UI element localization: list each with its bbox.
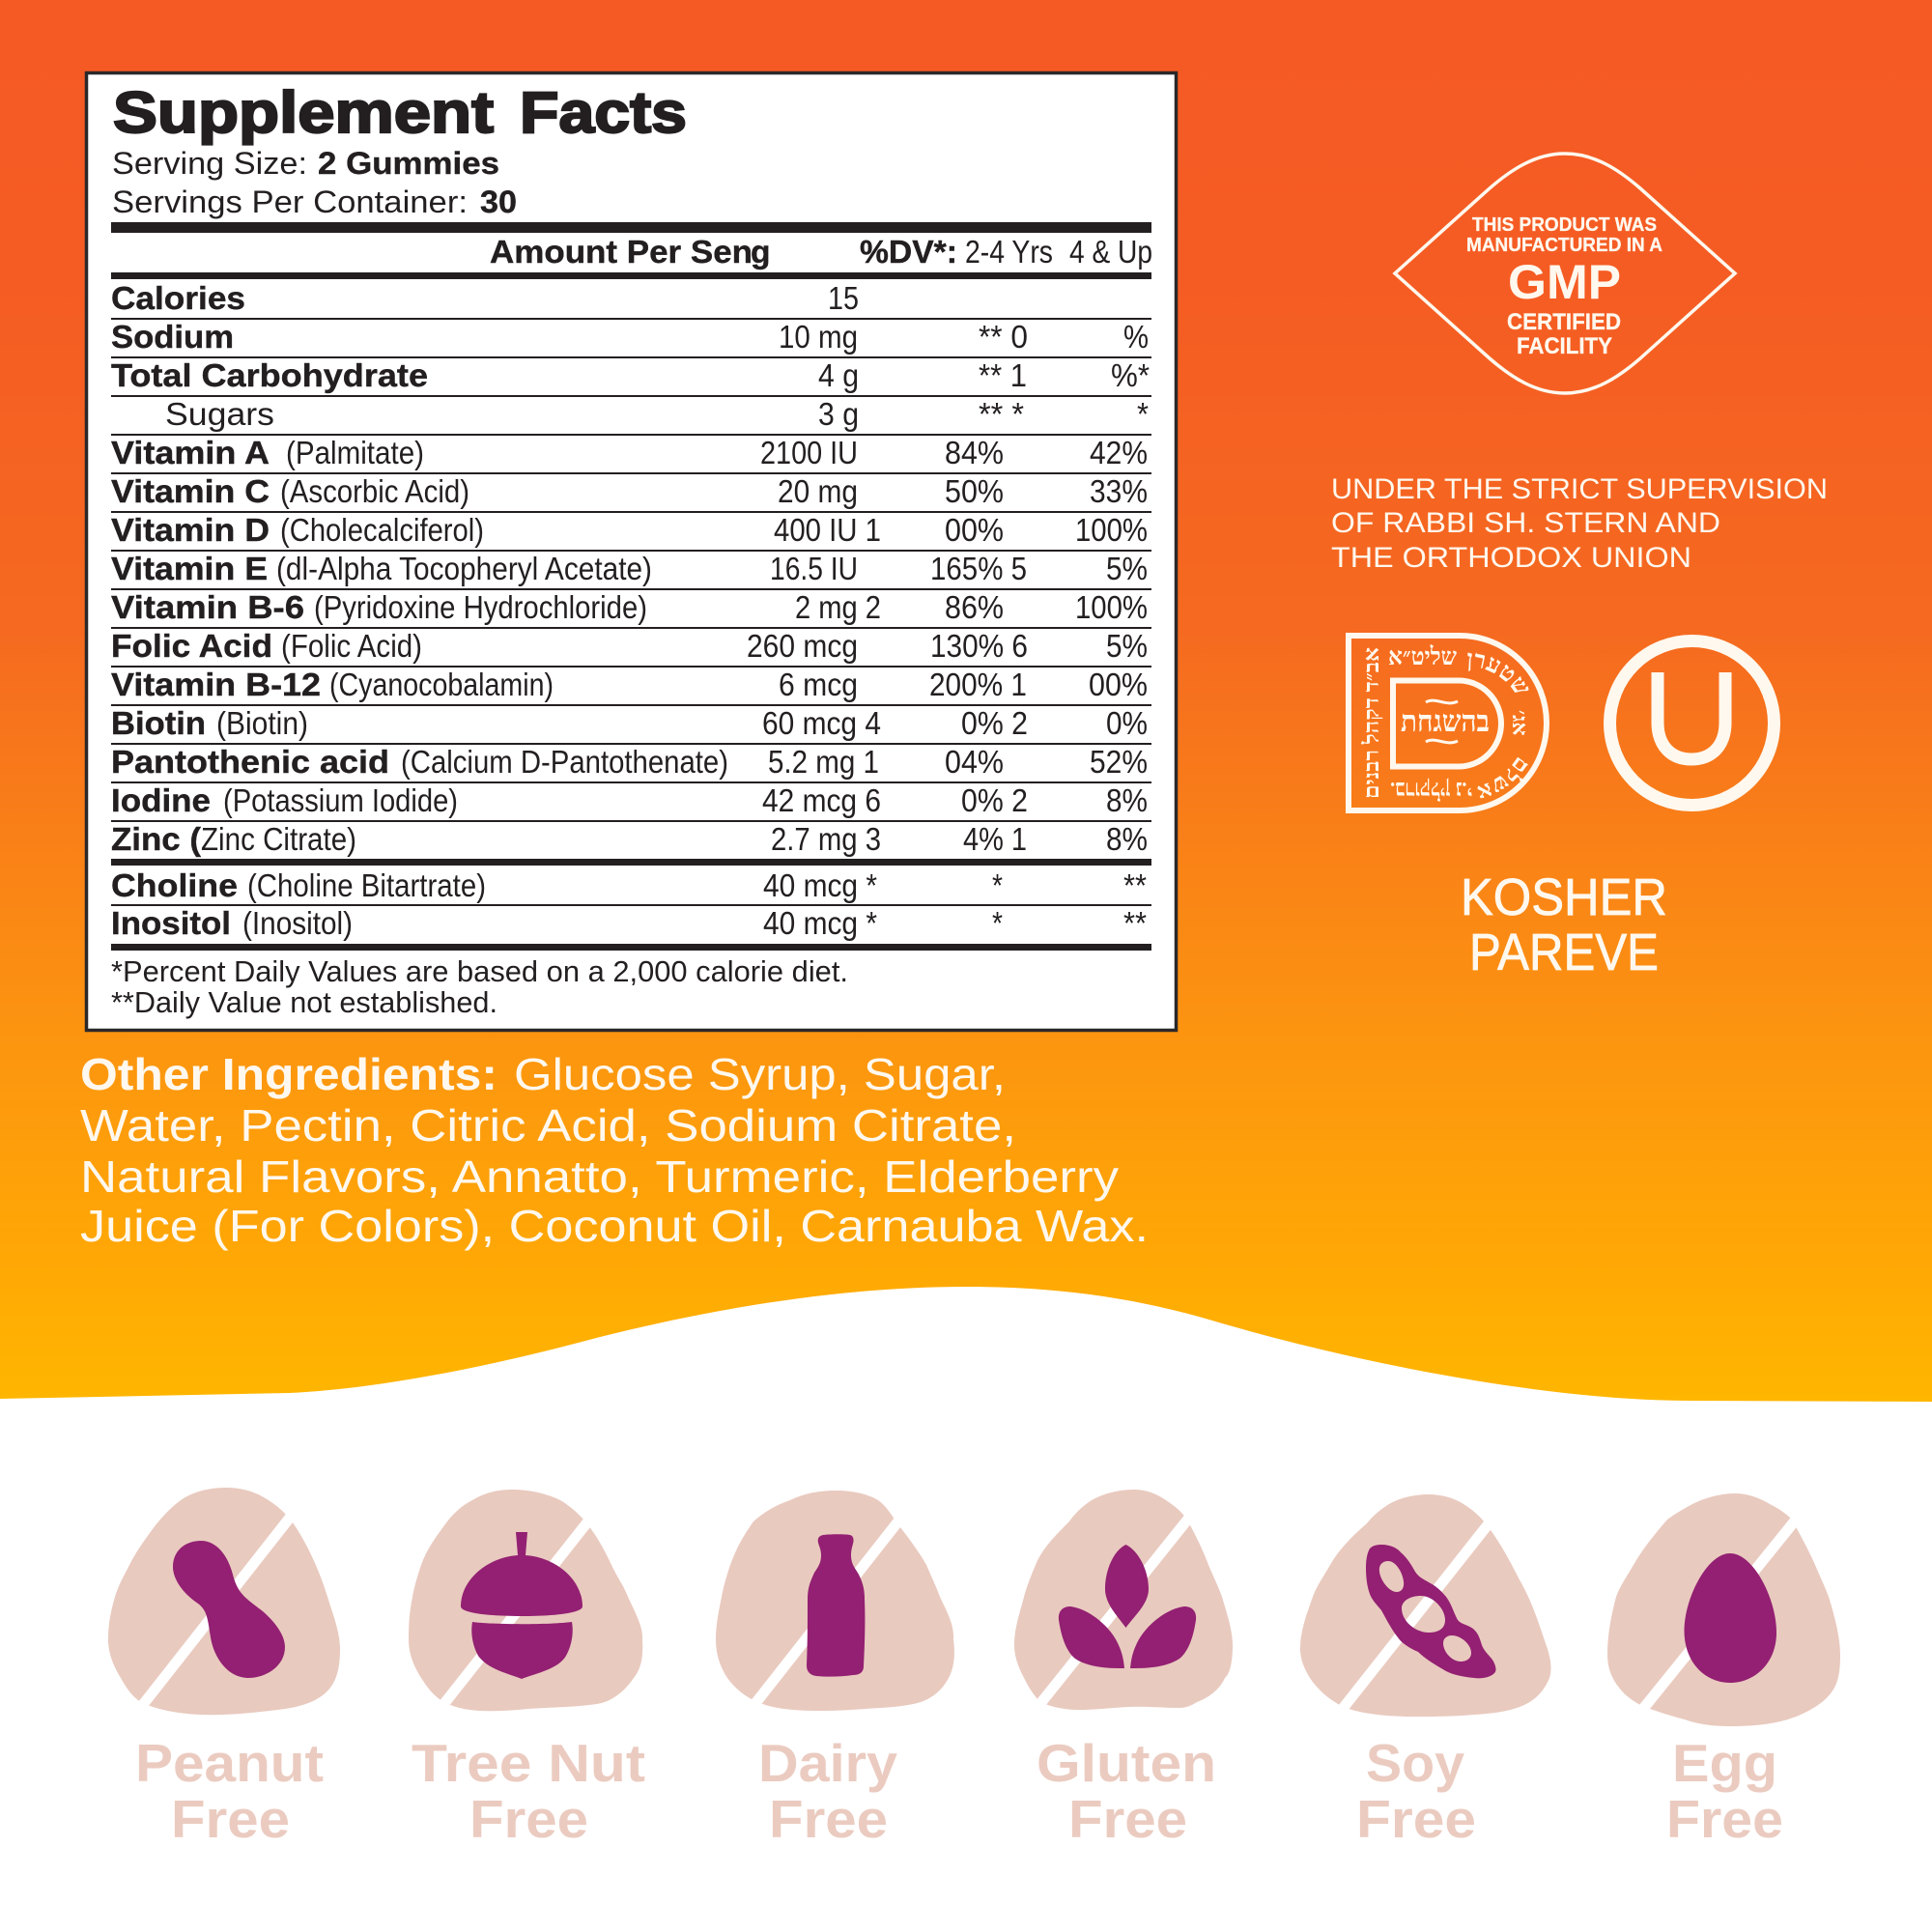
badge text: FACILITY xyxy=(1517,333,1612,359)
row: Iodine: 42 mcg 6 xyxy=(762,783,881,819)
icon: Rabbi Stern D kosher seal: בהשגחת xyxy=(1401,704,1490,738)
text block: other ingredients xyxy=(80,1049,1149,1251)
row: Vitamin E xyxy=(111,552,1148,587)
label: Egg xyxy=(1672,1733,1777,1793)
row: Sodium: 10 mg xyxy=(779,320,858,355)
label xyxy=(1356,1733,1476,1849)
label: Free xyxy=(1356,1789,1476,1849)
icon: Rabbi Stern D kosher seal: אב״ד דקהל רבנים xyxy=(1359,647,1383,799)
row: Vitamin D: 100% xyxy=(1075,513,1148,549)
row: Folic Acid: 260 mcg xyxy=(747,629,858,665)
row: Biotin: Biotin xyxy=(111,706,206,742)
footnotes: *Percent Daily Values are based on a 2,000 calorie diet. xyxy=(111,954,848,988)
row: Biotin: 60 mcg 4 xyxy=(762,706,881,742)
row: Folic Acid: (Folic Acid) xyxy=(281,629,422,665)
slash xyxy=(1634,1509,1804,1719)
label: Free xyxy=(1666,1789,1783,1849)
row: Vitamin B-12: 6 mcg xyxy=(779,668,858,703)
text block: rabbinical supervision xyxy=(1331,473,1828,574)
serving size xyxy=(112,146,499,181)
row: Total Carbohydrate: ** 1 xyxy=(979,358,1027,394)
label: Tree Nut xyxy=(412,1733,645,1793)
row: Iodine: 8% xyxy=(1106,783,1148,819)
slash xyxy=(435,1509,598,1716)
label xyxy=(758,1733,897,1849)
row: Choline: 40 mcg * xyxy=(763,868,877,904)
row: Vitamin C: 33% xyxy=(1090,474,1148,510)
column header: %DV*: xyxy=(860,235,957,270)
row: Vitamin B-6: (Pyridoxine Hydrochloride) xyxy=(314,590,647,626)
servings per container: 30 xyxy=(480,185,517,219)
label xyxy=(1037,1733,1216,1849)
label: Free xyxy=(1068,1789,1187,1849)
badge: GMP certified facility xyxy=(1395,154,1735,393)
row: Vitamin E: (dl-Alpha Tocopheryl Acetate) xyxy=(276,552,652,587)
row: Total Carbohydrate: %* xyxy=(1111,358,1150,394)
row: Vitamin A xyxy=(111,436,1148,471)
allergen: tree nut free xyxy=(409,1490,645,1849)
icon: egg xyxy=(1685,1553,1776,1683)
row: Vitamin A: 2100 IU xyxy=(760,436,858,471)
row: Choline: Choline xyxy=(111,868,238,904)
column header xyxy=(490,235,1152,270)
row: Zinc: 8% xyxy=(1106,822,1148,858)
row: Vitamin D xyxy=(111,513,1148,549)
text: Kosher Pareve: PAREVE xyxy=(1469,923,1659,981)
row: Sodium: % xyxy=(1123,320,1149,355)
column header: 4 & Up xyxy=(1069,235,1152,270)
row: Calories: Calories xyxy=(111,281,245,317)
icon: acorn xyxy=(461,1532,582,1679)
row: Choline: ** xyxy=(1123,868,1147,904)
allergen: soy free xyxy=(1300,1494,1550,1849)
row: Folic Acid: 130% 6 xyxy=(930,629,1028,665)
row: Iodine: Iodine xyxy=(111,783,211,819)
row: Choline: * xyxy=(992,868,1003,904)
row: Sugars: 3 g xyxy=(818,397,859,433)
row: Sugars: * xyxy=(1137,397,1149,433)
row: Sugars xyxy=(165,397,1149,433)
row: Biotin: 0% 2 xyxy=(961,706,1028,742)
label xyxy=(412,1733,645,1849)
row: Biotin xyxy=(111,706,1148,742)
blob xyxy=(108,1488,340,1715)
row: Vitamin B-6: 100% xyxy=(1075,590,1148,626)
text block: other ingredients: Natural Flavors, Annatto, Turmeric, Elderberry xyxy=(80,1151,1119,1202)
row: Vitamin B-6 xyxy=(111,590,1148,626)
panel: supplement facts xyxy=(87,73,1177,1030)
row: Vitamin E: 5% xyxy=(1106,552,1148,587)
row: Choline: (Choline Bitartrate) xyxy=(247,868,486,904)
row: Vitamin E: 16.5 IU xyxy=(770,552,858,587)
footnotes: **Daily Value not established. xyxy=(111,985,497,1019)
column header: 2-4 Yrs xyxy=(965,235,1053,270)
row: Vitamin E: Vitamin E xyxy=(111,552,268,587)
orange gradient background with wave xyxy=(0,0,1932,1402)
label: Free xyxy=(171,1789,290,1849)
row: Vitamin B-12: (Cyanocobalamin) xyxy=(329,668,554,703)
icon: Rabbi Stern D kosher seal: אג׳ xyxy=(1508,710,1532,735)
badge outline xyxy=(1395,154,1735,393)
row: Calories: 15 xyxy=(828,281,859,317)
row: Pantothenic acid: 5.2 mg 1 xyxy=(768,745,879,781)
label xyxy=(1666,1733,1783,1849)
icon: soybean pod xyxy=(1366,1545,1495,1678)
icon: Rabbi Stern D kosher seal: אשלם xyxy=(1478,757,1528,798)
column header: Amount Per Sen xyxy=(490,235,753,270)
row: Vitamin D: 00% xyxy=(945,513,1004,549)
row: Folic Acid xyxy=(111,629,1148,665)
slash xyxy=(1334,1513,1497,1719)
row: Pantothenic acid xyxy=(111,745,1148,781)
text block: other ingredients: Glucose Syrup, Sugar, xyxy=(514,1049,1006,1099)
row: Sugars: ** * xyxy=(979,397,1024,433)
label: Free xyxy=(469,1789,588,1849)
row: Vitamin C: 20 mg xyxy=(778,474,858,510)
row: Zinc xyxy=(111,822,1148,858)
row: Zinc: Zinc Citrate) xyxy=(201,822,356,858)
row: Folic Acid: Folic Acid xyxy=(111,629,272,665)
row: Sodium: Sodium xyxy=(111,320,234,355)
row: Iodine: 0% 2 xyxy=(961,783,1028,819)
row: Total Carbohydrate: Total Carbohydrate xyxy=(111,358,428,394)
text block: rabbinical supervision: UNDER THE STRICT SUPERVISION xyxy=(1331,473,1828,505)
row: Vitamin B-12: 200% 1 xyxy=(929,668,1027,703)
row: Pantothenic acid: 52% xyxy=(1090,745,1148,781)
slash xyxy=(1031,1503,1201,1716)
row: Vitamin B-12 xyxy=(111,668,1148,703)
serving size: 2 Gummies xyxy=(318,146,499,181)
row: Vitamin A: 42% xyxy=(1090,436,1148,471)
row: Folic Acid: 5% xyxy=(1106,629,1148,665)
row: Vitamin C: Vitamin C xyxy=(111,474,270,510)
panel frame xyxy=(87,73,1177,1030)
row: Zinc: 2.7 mg 3 xyxy=(771,822,881,858)
badge text: CERTIFIED xyxy=(1507,309,1621,335)
allergen: peanut free xyxy=(108,1488,340,1849)
badge text: MANUFACTURED IN A xyxy=(1466,235,1662,256)
icon: Rabbi Stern D kosher seal: שליט״א xyxy=(1388,644,1457,670)
label: Dairy xyxy=(758,1733,897,1793)
label: Gluten xyxy=(1037,1733,1216,1793)
icon: OU kosher symbol xyxy=(1609,641,1774,806)
badge text xyxy=(1466,214,1662,359)
row: Vitamin C: (Ascorbic Acid) xyxy=(280,474,469,510)
icon: wheat leaves xyxy=(1059,1545,1196,1668)
row: Vitamin A: (Palmitate) xyxy=(286,436,424,471)
row: Iodine xyxy=(111,783,1148,819)
footnotes xyxy=(111,954,848,1019)
row: Calories xyxy=(111,281,859,317)
row: Vitamin E: 165% 5 xyxy=(930,552,1027,587)
text block: rabbinical supervision: THE ORTHODOX UNION xyxy=(1331,542,1691,574)
row: Inositol: ** xyxy=(1123,906,1147,942)
row: Vitamin C xyxy=(111,474,1148,510)
icon: bottle xyxy=(807,1534,865,1677)
servings per container: Servings Per Container: xyxy=(112,185,468,219)
row: Sugars: Sugars xyxy=(165,397,274,433)
slash xyxy=(746,1509,908,1716)
row: Biotin: (Biotin) xyxy=(216,706,308,742)
label xyxy=(135,1733,324,1849)
icon: Rabbi Stern D kosher seal: ברוקלין נ.י. xyxy=(1390,777,1472,802)
row: Pantothenic acid: Pantothenic acid xyxy=(111,745,389,781)
column header: g xyxy=(751,235,770,270)
allergen: dairy free xyxy=(716,1491,954,1849)
row: Vitamin C: 50% xyxy=(945,474,1004,510)
row: Total Carbohydrate: 4 g xyxy=(818,358,859,394)
blob xyxy=(716,1491,954,1711)
heading: Supplement Facts: Facts xyxy=(520,80,687,145)
text: Kosher Pareve: KOSHER xyxy=(1461,868,1667,926)
row: Vitamin B-6: 2 mg 2 xyxy=(795,590,881,626)
text block: other ingredients: Other Ingredients: xyxy=(80,1049,497,1099)
row: Inositol xyxy=(111,906,1147,942)
heading: Supplement Facts xyxy=(113,80,687,145)
row: Total Carbohydrate xyxy=(111,358,1150,394)
row: Vitamin D: (Cholecalciferol) xyxy=(280,513,484,549)
row: Vitamin A: 84% xyxy=(945,436,1004,471)
row: Sodium xyxy=(111,320,1149,355)
row: Iodine: (Potassium Iodide) xyxy=(223,783,458,819)
text block: other ingredients: Water, Pectin, Citric Acid, Sodium Citrate, xyxy=(80,1100,1016,1151)
row: Inositol: Inositol xyxy=(111,906,231,942)
label: Soy xyxy=(1366,1733,1464,1793)
table rules xyxy=(111,222,1151,951)
row: Vitamin D: 400 IU 1 xyxy=(774,513,881,549)
row: Vitamin B-6: Vitamin B-6 xyxy=(111,590,304,626)
badge text: THIS PRODUCT WAS xyxy=(1472,214,1657,236)
blob xyxy=(1300,1494,1550,1717)
row: Inositol: 40 mcg * xyxy=(763,906,877,942)
icon: Rabbi Stern D kosher seal: שטערן xyxy=(1467,652,1528,693)
row: Inositol: * xyxy=(992,906,1003,942)
blob xyxy=(1014,1490,1233,1710)
row: Vitamin B-6: 86% xyxy=(945,590,1004,626)
row: Sodium: ** 0 xyxy=(979,320,1028,355)
row: Inositol: (Inositol) xyxy=(242,906,353,942)
row: Vitamin B-12: 00% xyxy=(1089,668,1148,703)
text: Kosher Pareve xyxy=(1461,868,1667,981)
allergen: gluten free xyxy=(1014,1490,1233,1849)
slash xyxy=(134,1504,300,1716)
icon: peanut xyxy=(173,1541,285,1678)
row: Pantothenic acid: 04% xyxy=(945,745,1004,781)
text block: other ingredients: Juice (For Colors), Coconut Oil, Carnauba Wax. xyxy=(80,1201,1149,1251)
serving size: Serving Size: xyxy=(112,146,307,181)
row: Vitamin B-12: Vitamin B-12 xyxy=(111,668,321,703)
allergen: egg free xyxy=(1607,1493,1840,1849)
row: Vitamin D: Vitamin D xyxy=(111,513,270,549)
row: Choline xyxy=(111,868,1147,904)
icon: Rabbi Stern D kosher seal xyxy=(1346,633,1549,813)
text block: rabbinical supervision: OF RABBI SH. STERN AND xyxy=(1331,507,1720,539)
label: Free xyxy=(769,1789,888,1849)
blob xyxy=(409,1490,642,1711)
row: Zinc: Zinc ( xyxy=(111,822,202,858)
row: Pantothenic acid: (Calcium D-Pantothenate) xyxy=(401,745,728,781)
row: Vitamin A: Vitamin A xyxy=(111,436,270,471)
row: Zinc: 4% 1 xyxy=(963,822,1027,858)
label: Peanut xyxy=(135,1733,324,1793)
badge text: GMP xyxy=(1508,255,1621,309)
row: Biotin: 0% xyxy=(1106,706,1148,742)
blob xyxy=(1607,1493,1840,1726)
heading: Supplement Facts: Supplement xyxy=(113,80,494,145)
